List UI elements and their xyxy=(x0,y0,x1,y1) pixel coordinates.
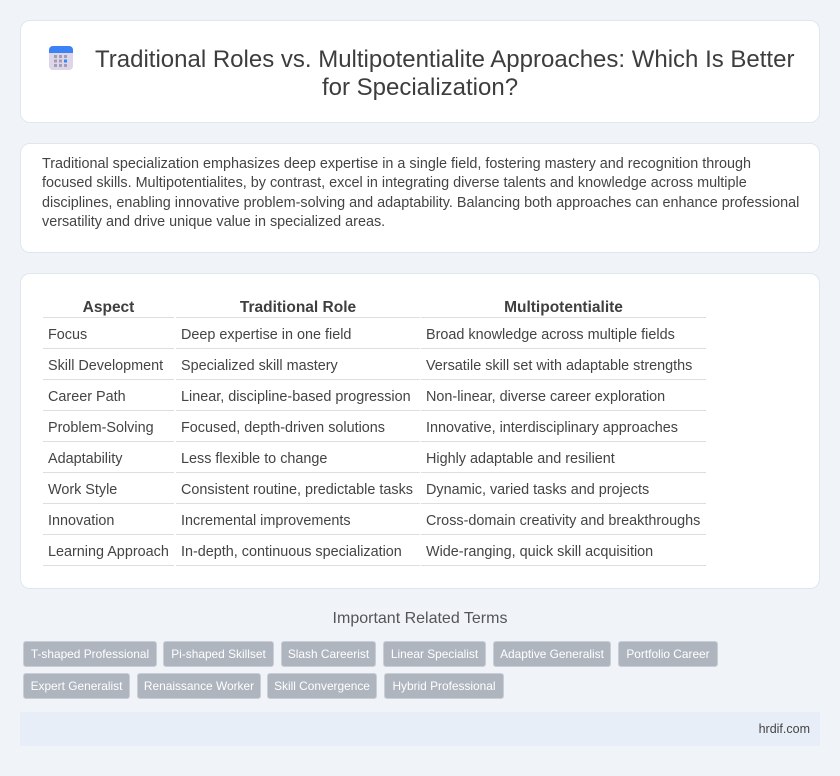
table rows: Focused, depth-driven solutions xyxy=(181,420,385,436)
tags: related terms xyxy=(23,641,718,699)
tags: related terms: Skill Convergence xyxy=(274,679,370,693)
table rows: Incremental improvements xyxy=(181,513,351,529)
table rows: Broad knowledge across multiple fields xyxy=(426,327,675,343)
table rows: Specialized skill mastery xyxy=(181,358,338,374)
table rows: Less flexible to change xyxy=(181,451,327,467)
tags: related terms: Adaptive Generalist xyxy=(500,647,604,661)
footer bar xyxy=(20,712,820,746)
tags: related terms: Portfolio Career xyxy=(626,647,710,661)
table rows: Highly adaptable and resilient xyxy=(426,451,615,467)
tags: related terms: Pi-shaped Skillset xyxy=(171,647,266,661)
table rows: Focus xyxy=(48,327,87,343)
panel: summary paragraph xyxy=(20,143,820,253)
table rows: Skill Development xyxy=(48,358,163,374)
table header: Traditional Role xyxy=(240,299,356,316)
footer source: hrdif.com xyxy=(759,722,810,736)
table rows: Deep expertise in one field xyxy=(181,327,351,343)
tags: related terms: Renaissance Worker xyxy=(144,679,254,693)
tags: related terms: Slash Careerist xyxy=(288,647,369,661)
text: summary: Traditional specialization emphasizes deep expertise in a single field, fostering mastery and recognition through xyxy=(42,156,751,172)
tags: related terms: Linear Specialist xyxy=(391,647,478,661)
text: summary: disciplines, enabling innovative problem-solving and adaptability. Balancing both approaches can enhance professional xyxy=(42,194,799,210)
text: summary xyxy=(42,156,799,230)
table rows: Dynamic, varied tasks and projects xyxy=(426,482,649,498)
panel: comparison table xyxy=(20,273,820,589)
table header: Aspect xyxy=(83,299,134,316)
title: Traditional Roles vs. Multipotentialite Approaches: Which Is Better xyxy=(95,46,794,73)
icon: calendar xyxy=(49,46,73,70)
heading: related terms: Important Related Terms xyxy=(333,610,507,627)
table rows: Linear, discipline-based progression xyxy=(181,389,411,405)
table rows: Problem-Solving xyxy=(48,420,154,436)
tags: related terms: Expert Generalist xyxy=(31,679,122,693)
table rows: Wide-ranging, quick skill acquisition xyxy=(426,544,653,560)
table rows: In-depth, continuous specialization xyxy=(181,544,402,560)
table rows: Work Style xyxy=(48,482,117,498)
tags: related terms: Hybrid Professional xyxy=(392,679,496,693)
title xyxy=(95,46,794,101)
table rows: Non-linear, diverse career exploration xyxy=(426,389,665,405)
table rows: Career Path xyxy=(48,389,126,405)
table header xyxy=(83,299,623,316)
table rows: Learning Approach xyxy=(48,544,169,560)
tags: related terms: T-shaped Professional xyxy=(31,647,149,661)
table rows: Innovation xyxy=(48,513,114,529)
table rows: Adaptability xyxy=(48,451,122,467)
text: summary: versatility and drive unique value in specialized areas. xyxy=(42,214,385,230)
title: for Specialization? xyxy=(322,74,518,101)
table header: Multipotentialite xyxy=(504,299,623,316)
table rows: Innovative, interdisciplinary approaches xyxy=(426,420,678,436)
table rows xyxy=(43,317,706,566)
table rows: Versatile skill set with adaptable strengths xyxy=(426,358,692,374)
table rows: Cross-domain creativity and breakthroughs xyxy=(426,513,700,529)
header card xyxy=(20,20,820,123)
table rows: Consistent routine, predictable tasks xyxy=(181,482,413,498)
text: summary: focused skills. Multipotentialites, by contrast, excel in integrating diverse talents and knowledge across multiple xyxy=(42,175,747,191)
